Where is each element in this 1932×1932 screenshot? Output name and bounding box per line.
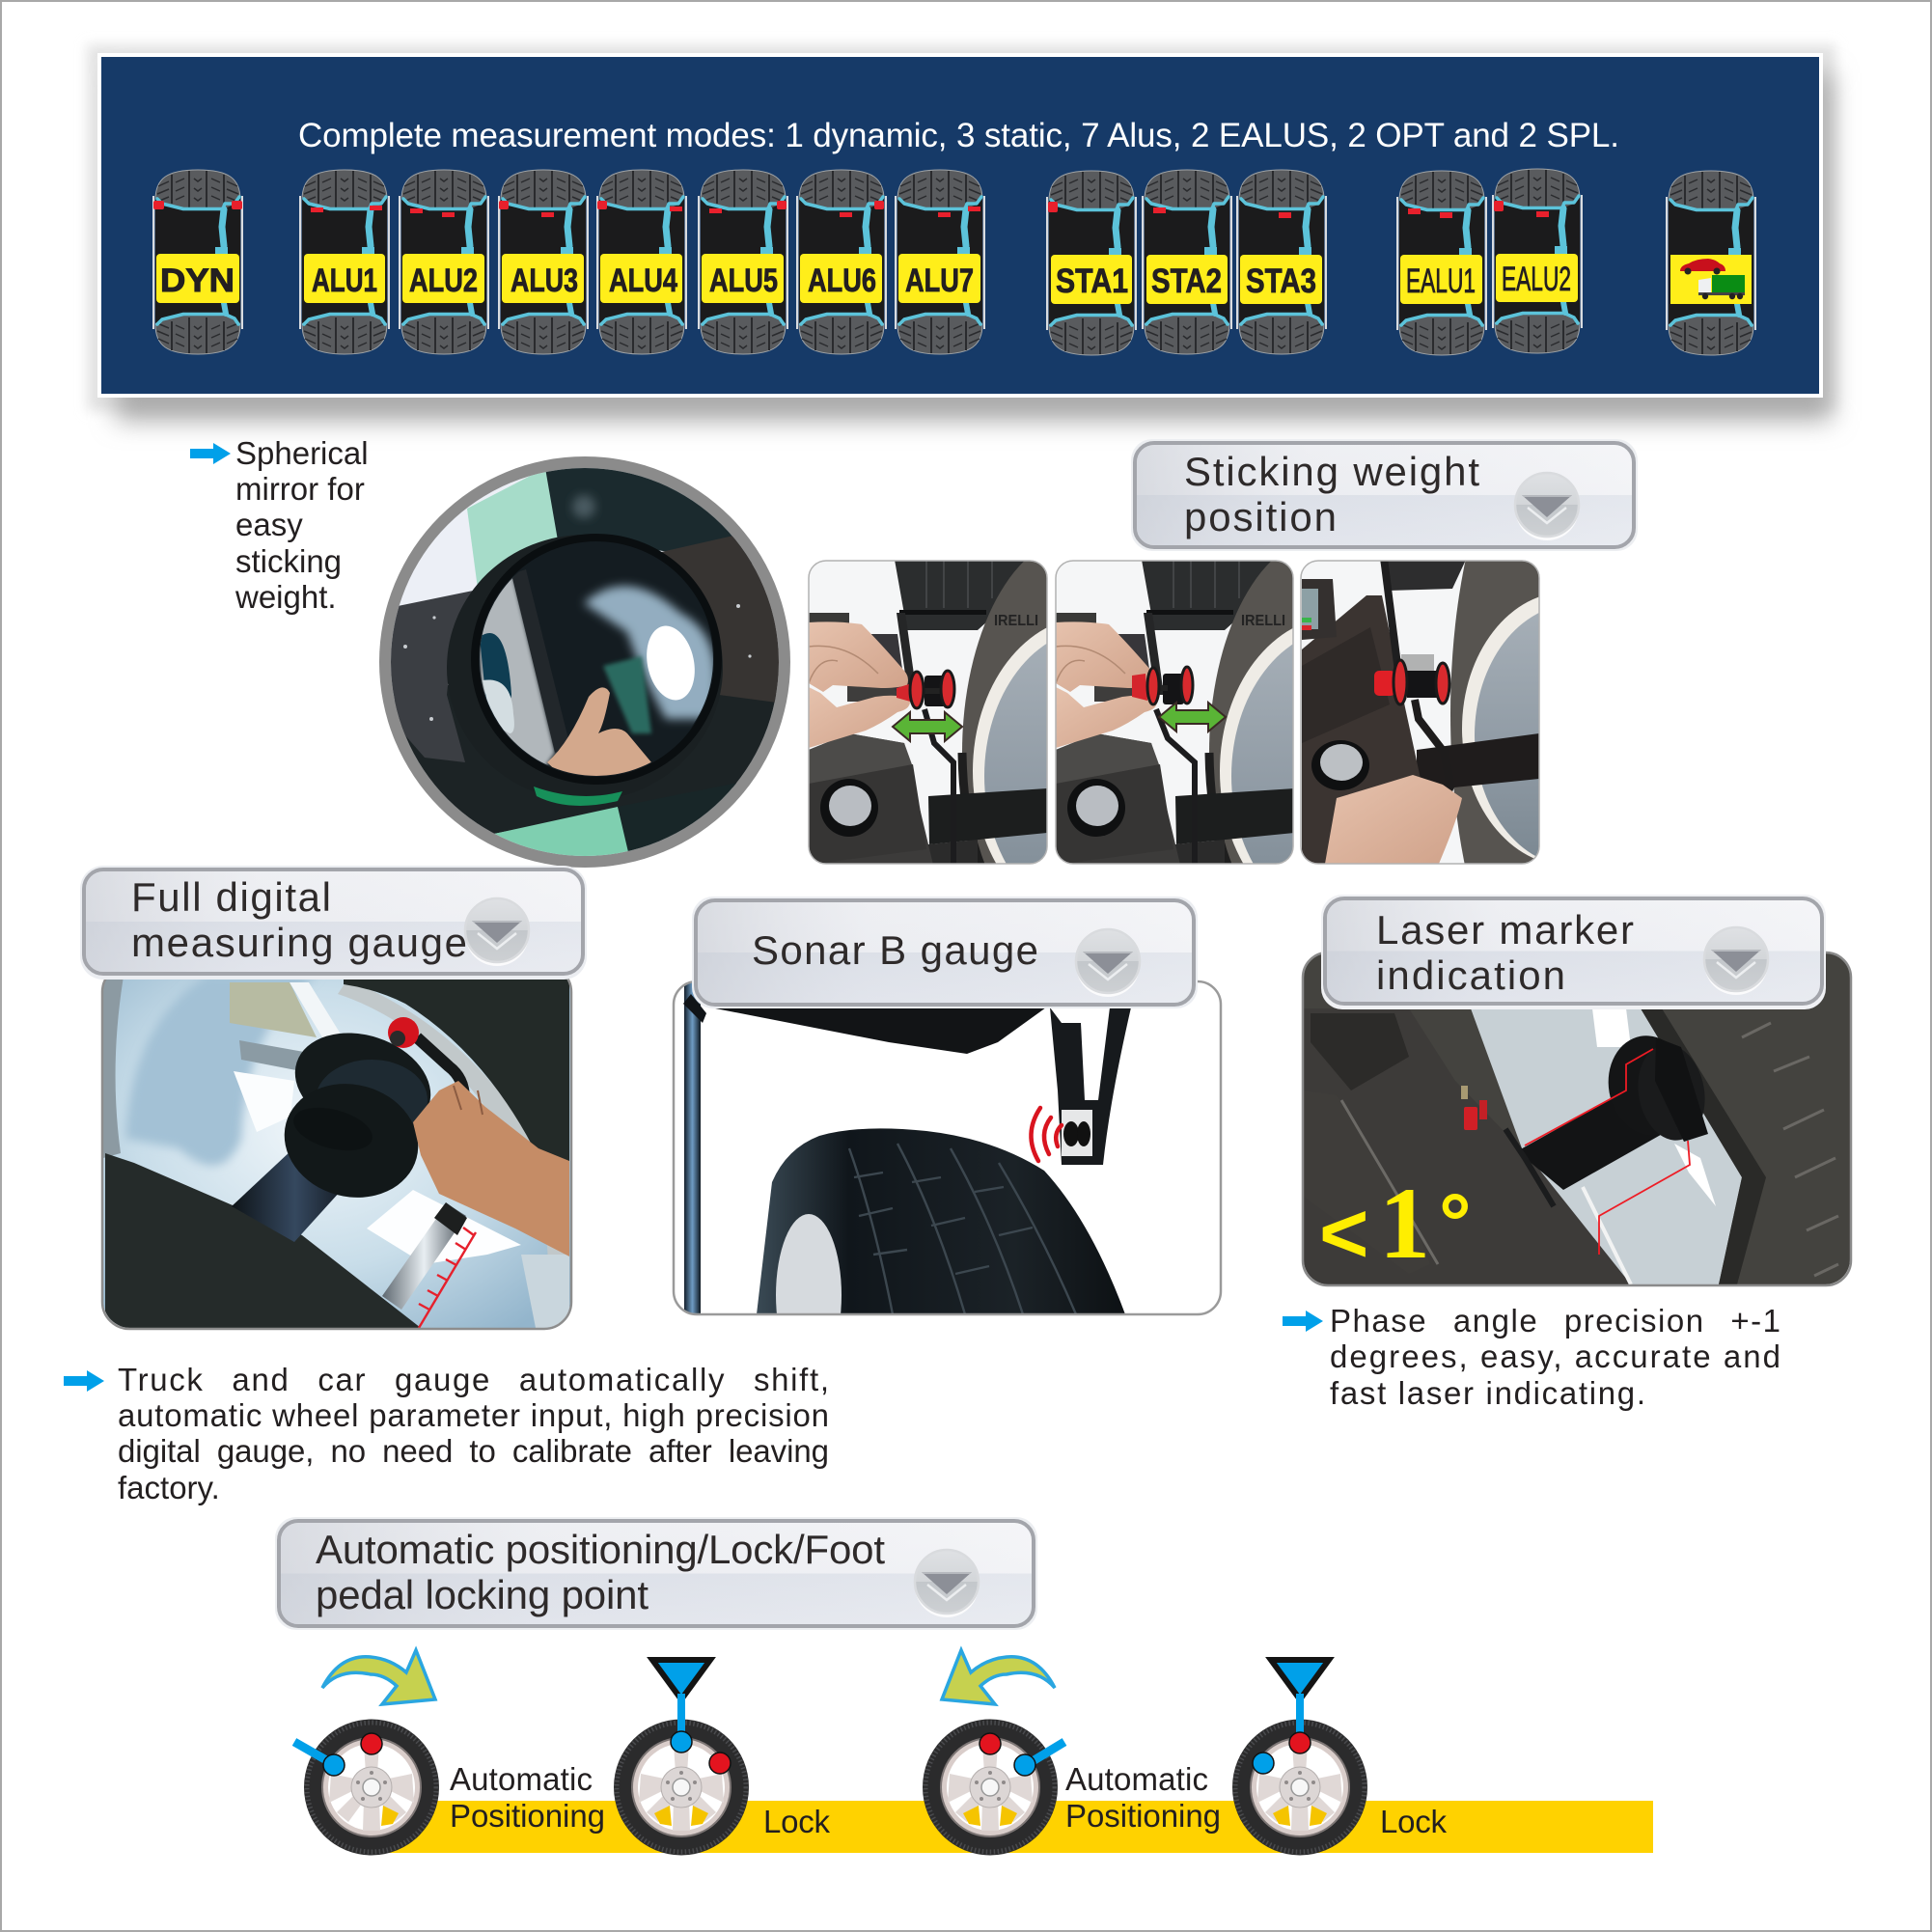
tire: STA3: STA3 bbox=[1246, 262, 1316, 300]
tire: STA1: STA1 bbox=[1056, 262, 1128, 300]
text block: spherical mirror: sticking bbox=[235, 543, 342, 579]
button: sonar B gauge bbox=[692, 897, 1198, 1008]
label: less than one degree: < bbox=[1319, 1185, 1368, 1281]
tire: ALU3: ALU3 bbox=[511, 262, 578, 299]
label: less than one degree bbox=[1322, 1190, 1468, 1257]
heading: automatic positioning: pedal locking point bbox=[316, 1572, 649, 1617]
tire: ALU6: ALU6 bbox=[808, 262, 876, 299]
tire: ALU1 bbox=[300, 170, 389, 354]
tire: ALU5 bbox=[699, 170, 787, 354]
label: lock 1: Lock bbox=[763, 1804, 830, 1839]
tire: ALU1: ALU1 bbox=[312, 262, 377, 299]
tire: car and truck mode bbox=[1667, 171, 1755, 355]
heading: laser marker: Laser marker bbox=[1376, 907, 1634, 952]
text block: spherical mirror: weight. bbox=[235, 579, 337, 615]
wheel 2: lock bbox=[614, 1660, 749, 1855]
tire: STA3 bbox=[1237, 170, 1326, 354]
text block: spherical mirror: easy bbox=[235, 507, 303, 542]
button: laser marker indication bbox=[1321, 895, 1826, 1009]
tire: EALU1: EALU1 bbox=[1406, 262, 1476, 300]
tire: ALU7 bbox=[896, 170, 984, 354]
text block: truck and car gauge: Truck and car gauge automatically shift, bbox=[118, 1362, 829, 1397]
arrow: curved left bbox=[942, 1650, 1055, 1704]
heading: automatic positioning: Automatic positioning/Lock/Foot bbox=[316, 1527, 885, 1572]
label: automatic positioning 1: Automatic bbox=[450, 1761, 593, 1797]
weight clamp bbox=[1374, 654, 1454, 791]
photo: sticking weight 3 bbox=[1300, 560, 1540, 865]
icon: sonar waves bbox=[1031, 1108, 1062, 1161]
text block: spherical mirror: Spherical bbox=[235, 435, 369, 471]
icon: dropdown bbox=[465, 898, 529, 966]
red ruler bbox=[419, 1228, 476, 1328]
button: automatic positioning bbox=[275, 1517, 1037, 1630]
heading: sticking weight: Sticking weight bbox=[1184, 449, 1479, 494]
icon: dropdown bbox=[1076, 929, 1140, 997]
icon: blue arrow bbox=[64, 1370, 104, 1392]
wheel 1: positioning bbox=[294, 1720, 439, 1855]
photo: full digital gauge bbox=[102, 965, 571, 1329]
heading: full digital: measuring gauge bbox=[131, 920, 467, 965]
text block: phase angle: degrees, easy, accurate and bbox=[1330, 1339, 1780, 1374]
heading: laser marker: indication bbox=[1376, 952, 1565, 998]
tire: EALU2: EALU2 bbox=[1502, 261, 1571, 298]
wheel 4: lock bbox=[1232, 1660, 1367, 1855]
icon: dropdown bbox=[915, 1550, 979, 1617]
yellow band bbox=[386, 1801, 1653, 1853]
text block: phase angle: fast laser indicating. bbox=[1330, 1375, 1645, 1411]
arrow: curved right bbox=[322, 1650, 435, 1704]
tire: EALU2 bbox=[1493, 169, 1582, 353]
label: lock 2: Lock bbox=[1380, 1804, 1448, 1839]
text block: phase angle: Phase angle precision +-1 bbox=[1330, 1303, 1780, 1339]
tire: ALU3 bbox=[499, 170, 588, 354]
icon: red car bbox=[1680, 259, 1725, 274]
tire: ALU4: ALU4 bbox=[609, 262, 677, 299]
label: less than one degree: ° bbox=[1439, 1177, 1472, 1268]
label: automatic positioning 2: Automatic bbox=[1065, 1761, 1208, 1797]
icon: dropdown bbox=[1704, 927, 1768, 995]
tire: STA2 bbox=[1143, 170, 1231, 354]
text block: truck and car gauge: digital gauge, no need to calibrate after leaving bbox=[118, 1433, 829, 1469]
heading: sonar: Sonar B gauge bbox=[752, 927, 1038, 973]
text block: truck and car gauge: factory. bbox=[118, 1470, 220, 1505]
button: full digital measuring gauge bbox=[80, 866, 587, 980]
icon: green truck bbox=[1698, 275, 1745, 299]
red laser lines bbox=[1525, 1049, 1690, 1255]
tire: ALU2: ALU2 bbox=[409, 262, 478, 299]
heading: full digital: Full digital bbox=[131, 874, 331, 920]
photo: sonar gauge bbox=[672, 980, 1222, 1316]
panel: measurement modes bbox=[87, 44, 1835, 421]
heading: measurement modes: Complete measurement modes: 1 dynamic, 3 static, 7 Alus, 2 EALUS, 2 OPT and 2 SPL. bbox=[298, 117, 1619, 154]
tire: DYN: DYN bbox=[160, 262, 235, 299]
text block: spherical mirror: mirror for bbox=[235, 471, 365, 507]
diagram: positioning and lock sequence bbox=[294, 1650, 1653, 1855]
tire: ALU7: ALU7 bbox=[905, 262, 974, 299]
tire: DYN bbox=[153, 170, 242, 354]
tire: STA1 bbox=[1047, 171, 1136, 355]
tire: ALU4 bbox=[597, 170, 686, 354]
callout: phase angle bbox=[1283, 1303, 1791, 1411]
label: automatic positioning 2: Positioning bbox=[1065, 1798, 1221, 1834]
label: automatic positioning 1: Positioning bbox=[450, 1798, 605, 1834]
heading: sticking weight: position bbox=[1184, 494, 1337, 539]
callout: spherical mirror text bbox=[190, 435, 377, 615]
tire: ALU6 bbox=[797, 170, 886, 354]
callout: truck and car gauge bbox=[64, 1362, 840, 1505]
arrow: green double bbox=[1159, 703, 1226, 731]
text block: truck and car gauge: automatic wheel parameter input, high precision bbox=[118, 1397, 829, 1433]
tire: ALU2 bbox=[400, 170, 488, 354]
icon: blue arrow bbox=[190, 443, 231, 464]
photo: laser marker bbox=[1303, 952, 1851, 1285]
arrow: green double bbox=[893, 712, 962, 741]
tire: ALU5: ALU5 bbox=[709, 262, 778, 299]
tire: STA2: STA2 bbox=[1151, 262, 1222, 300]
photo: sticking weight 2 bbox=[1055, 560, 1294, 865]
wheel 3: positioning bbox=[923, 1720, 1064, 1855]
button: sticking weight position bbox=[1131, 439, 1638, 551]
tire: EALU1 bbox=[1397, 171, 1486, 355]
icon: dropdown bbox=[1515, 473, 1579, 540]
weight clamp bbox=[897, 671, 954, 864]
photo: sticking weight 1 bbox=[808, 560, 1048, 865]
weight clamp bbox=[1132, 667, 1195, 864]
hand bbox=[413, 1081, 569, 1256]
label: less than one degree: 1 bbox=[1379, 1167, 1430, 1280]
icon: blue arrow bbox=[1283, 1311, 1323, 1332]
photo: spherical mirror circle bbox=[379, 456, 791, 869]
hand bbox=[1325, 775, 1462, 864]
